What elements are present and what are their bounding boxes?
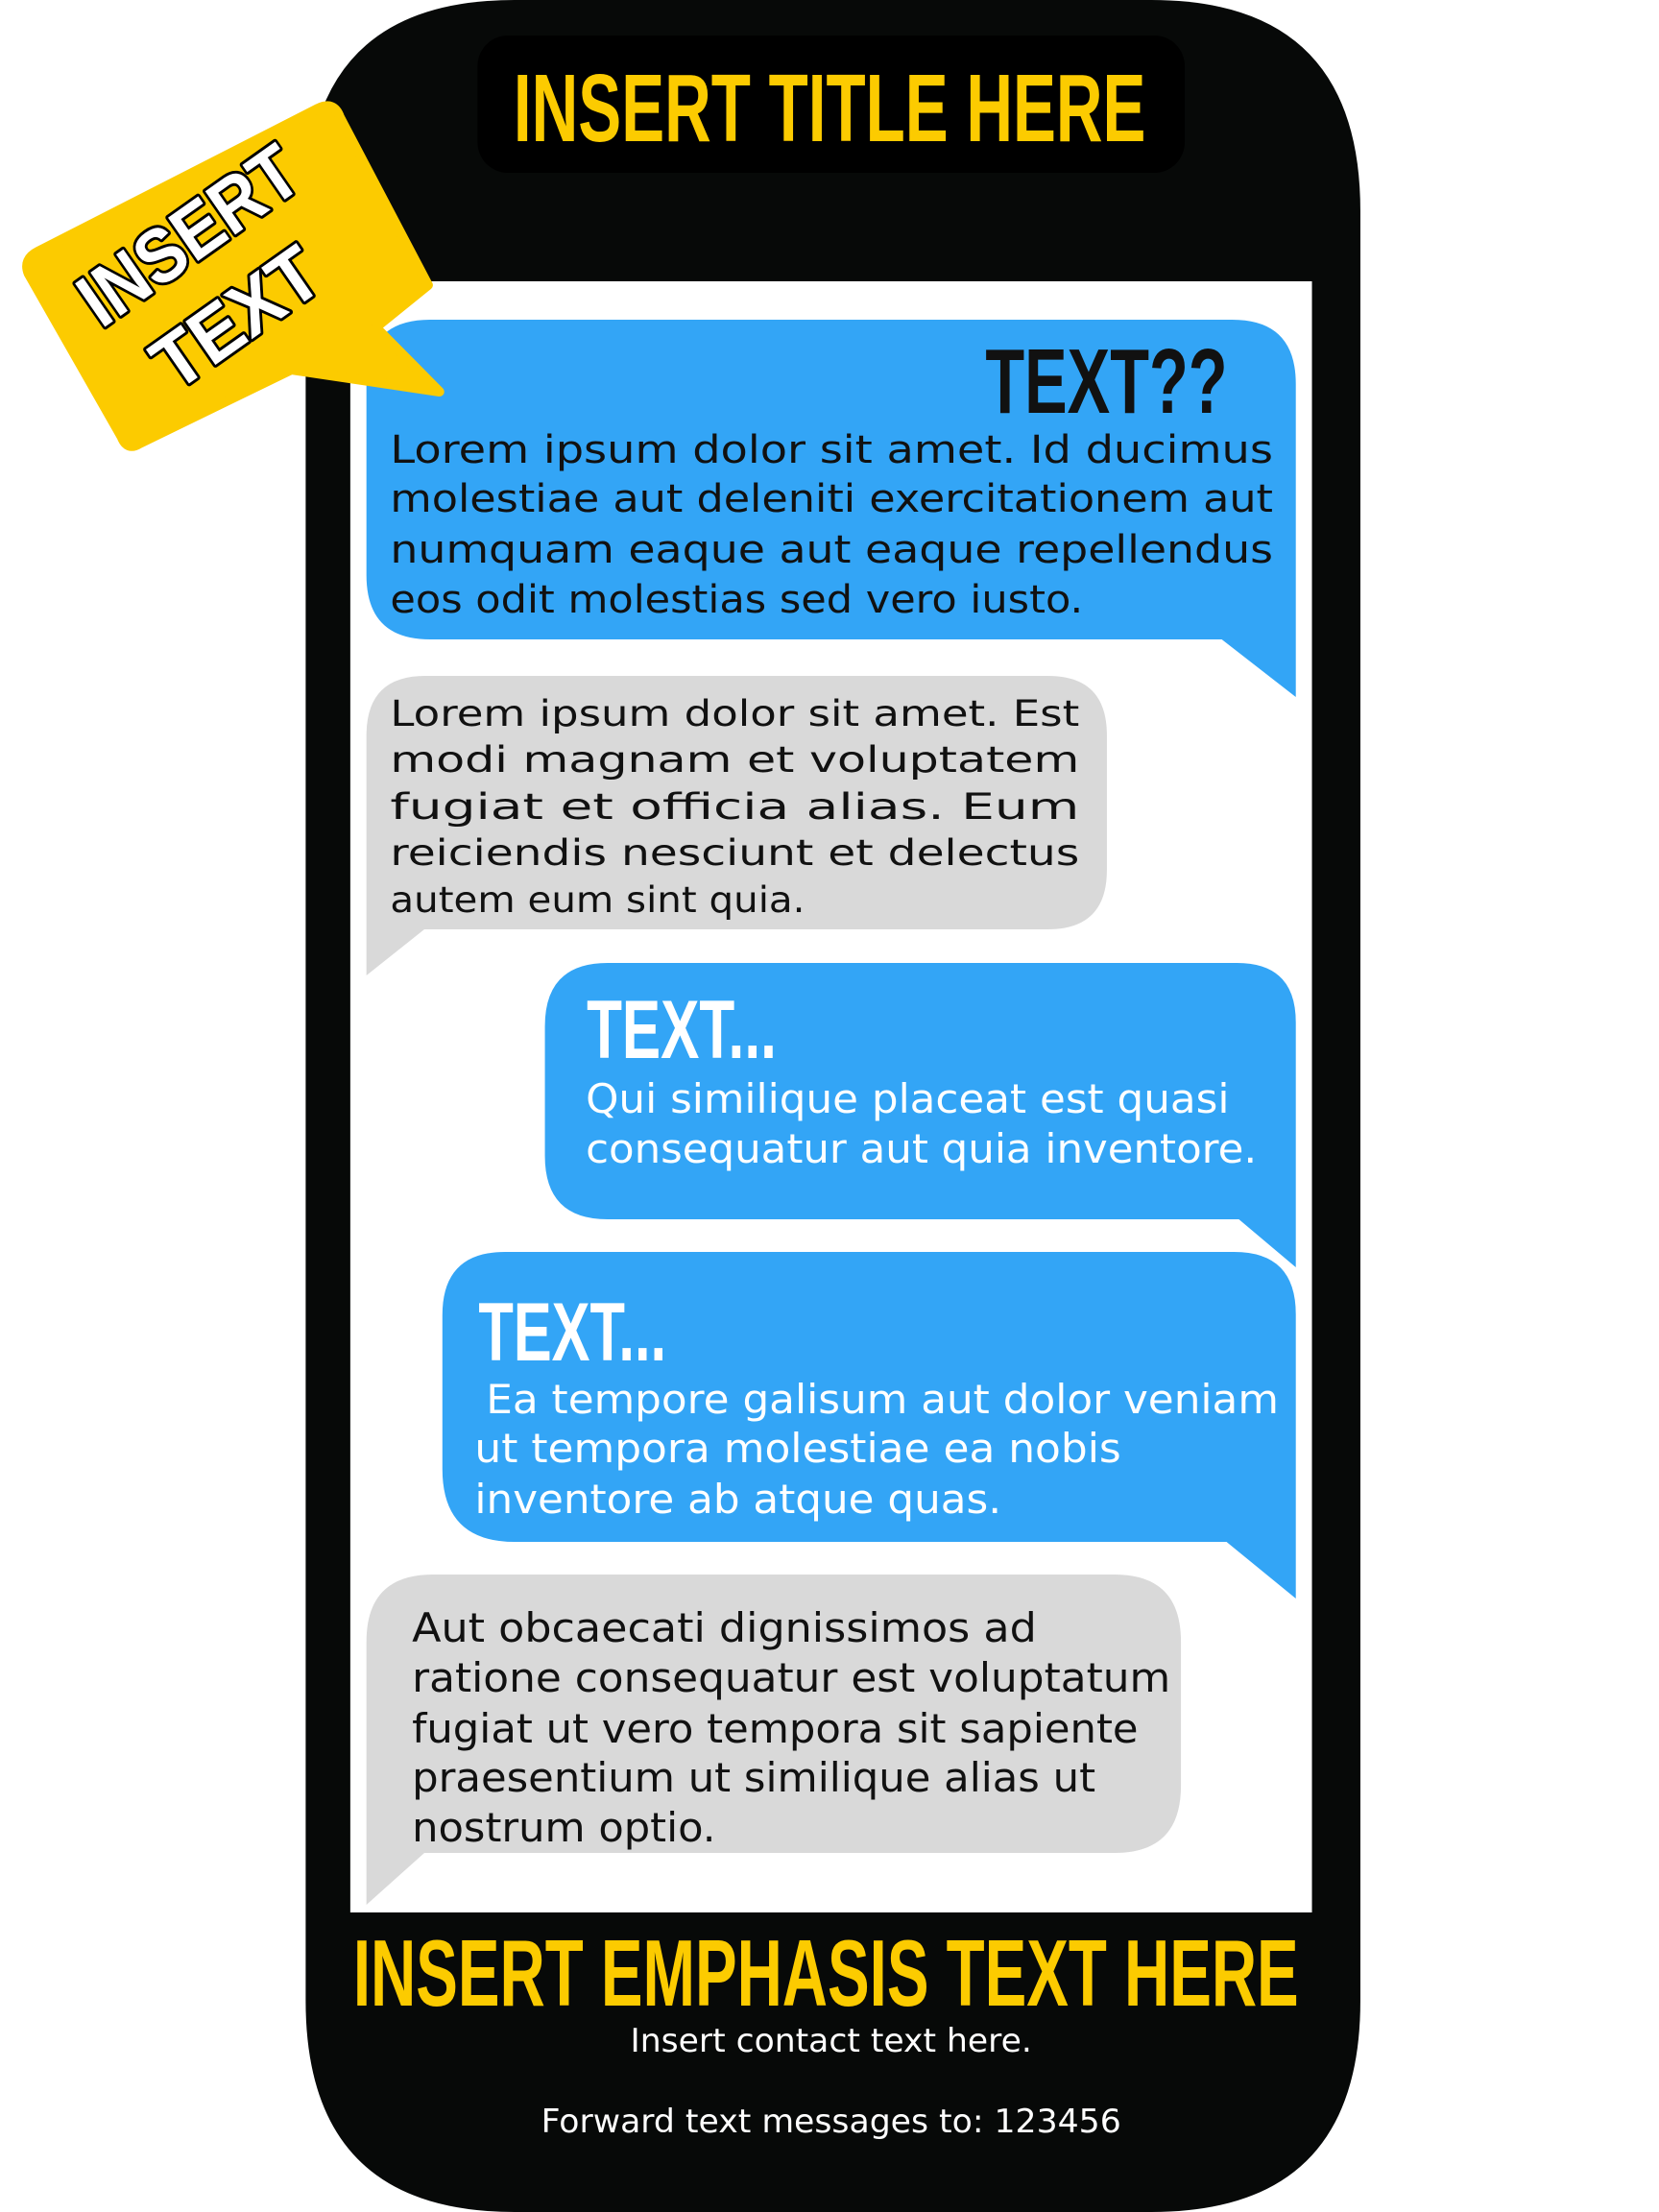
title pill (477, 36, 1185, 173)
forward text: Forward text messages to: 123456 (541, 2103, 1121, 2140)
badge: insert text callout: INSERT (61, 128, 315, 343)
phone body (305, 0, 1360, 2212)
title: INSERT TITLE HERE (514, 56, 1145, 162)
bubble 1: blue: TEXT?? (985, 331, 1228, 433)
bubble 5: gray: fugiat ut vero tempora sit sapiente (412, 1705, 1139, 1752)
bubble 3: blue (545, 963, 1296, 1267)
contact text: Insert contact text here. (631, 2022, 1032, 2059)
phone screen (350, 281, 1312, 1912)
bubble 5: gray: praesentium ut similique alias ut (412, 1754, 1095, 1801)
bubble 5: gray: ratione consequatur est voluptatum (412, 1654, 1170, 1701)
bubble 4: blue: Ea tempore galisum aut dolor veniam (486, 1376, 1279, 1423)
bubble 2: gray: Lorem ipsum dolor sit amet. Est (390, 693, 1079, 734)
bubble 2: gray: autem eum sint quia. (390, 879, 805, 921)
bubble 1: blue: eos odit molestias sed vero iusto. (390, 578, 1083, 622)
bubble 4: blue: inventore ab atque quas. (474, 1476, 1001, 1523)
bubble 1: blue (367, 320, 1296, 697)
bubble 4: blue: ut tempora molestiae ea nobis (474, 1425, 1121, 1472)
bubble 3: blue: Qui similique placeat est quasi (586, 1075, 1229, 1122)
bubble 3: blue: consequatur aut quia inventore. (586, 1125, 1257, 1172)
bubble 5: gray: Aut obcaecati dignissimos ad (412, 1604, 1037, 1651)
bubble 2: gray: fugiat et officia alias. Eum (390, 786, 1079, 828)
bubble 2: gray (367, 676, 1107, 975)
bubble 1: blue: numquam eaque aut eaque repellendus (390, 528, 1273, 572)
bubble 4: blue: TEXT... (478, 1287, 666, 1379)
bubble 1: blue: Lorem ipsum dolor sit amet. Id ducimus (390, 428, 1273, 472)
bubble 1: blue: molestiae aut deleniti exercitationem aut (390, 477, 1273, 521)
bubble 5: gray (367, 1575, 1181, 1905)
bubble 4: blue (443, 1252, 1296, 1599)
badge: insert text callout: TEXT (135, 228, 336, 407)
bubble 2: gray: reiciendis nesciunt et delectus (390, 832, 1079, 874)
badge: insert text callout (27, 106, 440, 446)
bubble 2: gray: modi magnam et voluptatem (390, 739, 1079, 781)
bubble 5: gray: nostrum optio. (412, 1804, 716, 1851)
bubble 3: blue: TEXT... (587, 985, 777, 1076)
